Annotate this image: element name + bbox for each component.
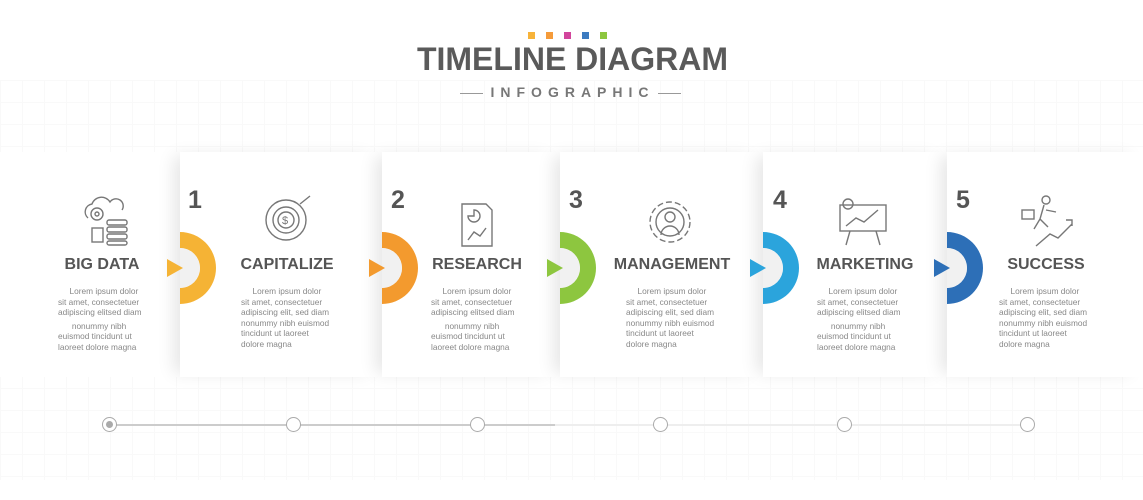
text: adipiscing elit, sed diam <box>999 307 1087 317</box>
text blocks: adipiscing elitsed diam <box>58 307 141 317</box>
text: nonummy nibh euismod <box>626 318 714 328</box>
icon: research <box>462 204 492 246</box>
icon: big data <box>85 197 127 245</box>
text: sit amet, consectetuer <box>817 297 898 307</box>
headings: BIG DATA <box>65 256 139 273</box>
text: euismod tincidunt ut <box>431 331 505 341</box>
text blocks: Lorem ipsum dolor <box>70 286 138 296</box>
text: sit amet, consectetuer <box>999 297 1080 307</box>
text: Lorem ipsum dolor <box>829 286 897 296</box>
text: SUCCESS <box>1007 256 1085 273</box>
text: 3 <box>569 186 583 214</box>
panel: cards <box>170 155 947 374</box>
text blocks: nonummy nibh <box>72 321 126 331</box>
subtitle: INFOGRAPHIC <box>490 84 654 100</box>
text: dolore magna <box>626 339 677 349</box>
icon: capitalize: $ <box>282 215 288 227</box>
text blocks: euismod tincidunt ut <box>58 331 132 341</box>
title block <box>417 32 728 100</box>
text: adipiscing elitsed diam <box>817 307 900 317</box>
text: 2 <box>391 186 405 214</box>
text blocks <box>58 286 141 352</box>
text: Lorem ipsum dolor <box>443 286 511 296</box>
text: sit amet, consectetuer <box>431 297 512 307</box>
icon: success <box>1022 196 1072 246</box>
icon: management <box>650 202 690 242</box>
text: laoreet dolore magna <box>817 342 895 352</box>
text: MANAGEMENT <box>614 256 730 273</box>
text: tincidunt ut laoreet <box>999 328 1067 338</box>
text: dolore magna <box>241 339 292 349</box>
title: TIMELINE DIAGRAM <box>417 41 728 77</box>
text: 4 <box>773 186 787 214</box>
text blocks: laoreet dolore magna <box>58 342 136 352</box>
text: tincidunt ut laoreet <box>241 328 309 338</box>
text: adipiscing elit, sed diam <box>241 307 329 317</box>
timeline <box>102 417 1035 432</box>
text: 5 <box>956 186 970 214</box>
background grid <box>0 80 1143 480</box>
icon: marketing <box>840 199 886 245</box>
text: tincidunt ut laoreet <box>626 328 694 338</box>
numbers: 1 <box>188 186 202 214</box>
text: Lorem ipsum dolor <box>638 286 706 296</box>
color squares <box>528 32 607 39</box>
text: nonummy nibh <box>831 321 885 331</box>
text: Lorem ipsum dolor <box>1011 286 1079 296</box>
text: adipiscing elitsed diam <box>431 307 514 317</box>
text: sit amet, consectetuer <box>241 297 322 307</box>
text: nonummy nibh <box>445 321 499 331</box>
text: Lorem ipsum dolor <box>253 286 321 296</box>
text: CAPITALIZE <box>240 256 334 273</box>
text: MARKETING <box>817 256 913 273</box>
text: nonummy nibh euismod <box>241 318 329 328</box>
text: nonummy nibh euismod <box>999 318 1087 328</box>
icon: capitalize <box>266 196 310 240</box>
text: euismod tincidunt ut <box>817 331 891 341</box>
text: RESEARCH <box>432 256 522 273</box>
text: laoreet dolore magna <box>431 342 509 352</box>
arrows <box>167 259 183 277</box>
text: sit amet, consectetuer <box>626 297 707 307</box>
text blocks: sit amet, consectetuer <box>58 297 139 307</box>
text: adipiscing elit, sed diam <box>626 307 714 317</box>
icons <box>84 195 1073 247</box>
text: dolore magna <box>999 339 1050 349</box>
